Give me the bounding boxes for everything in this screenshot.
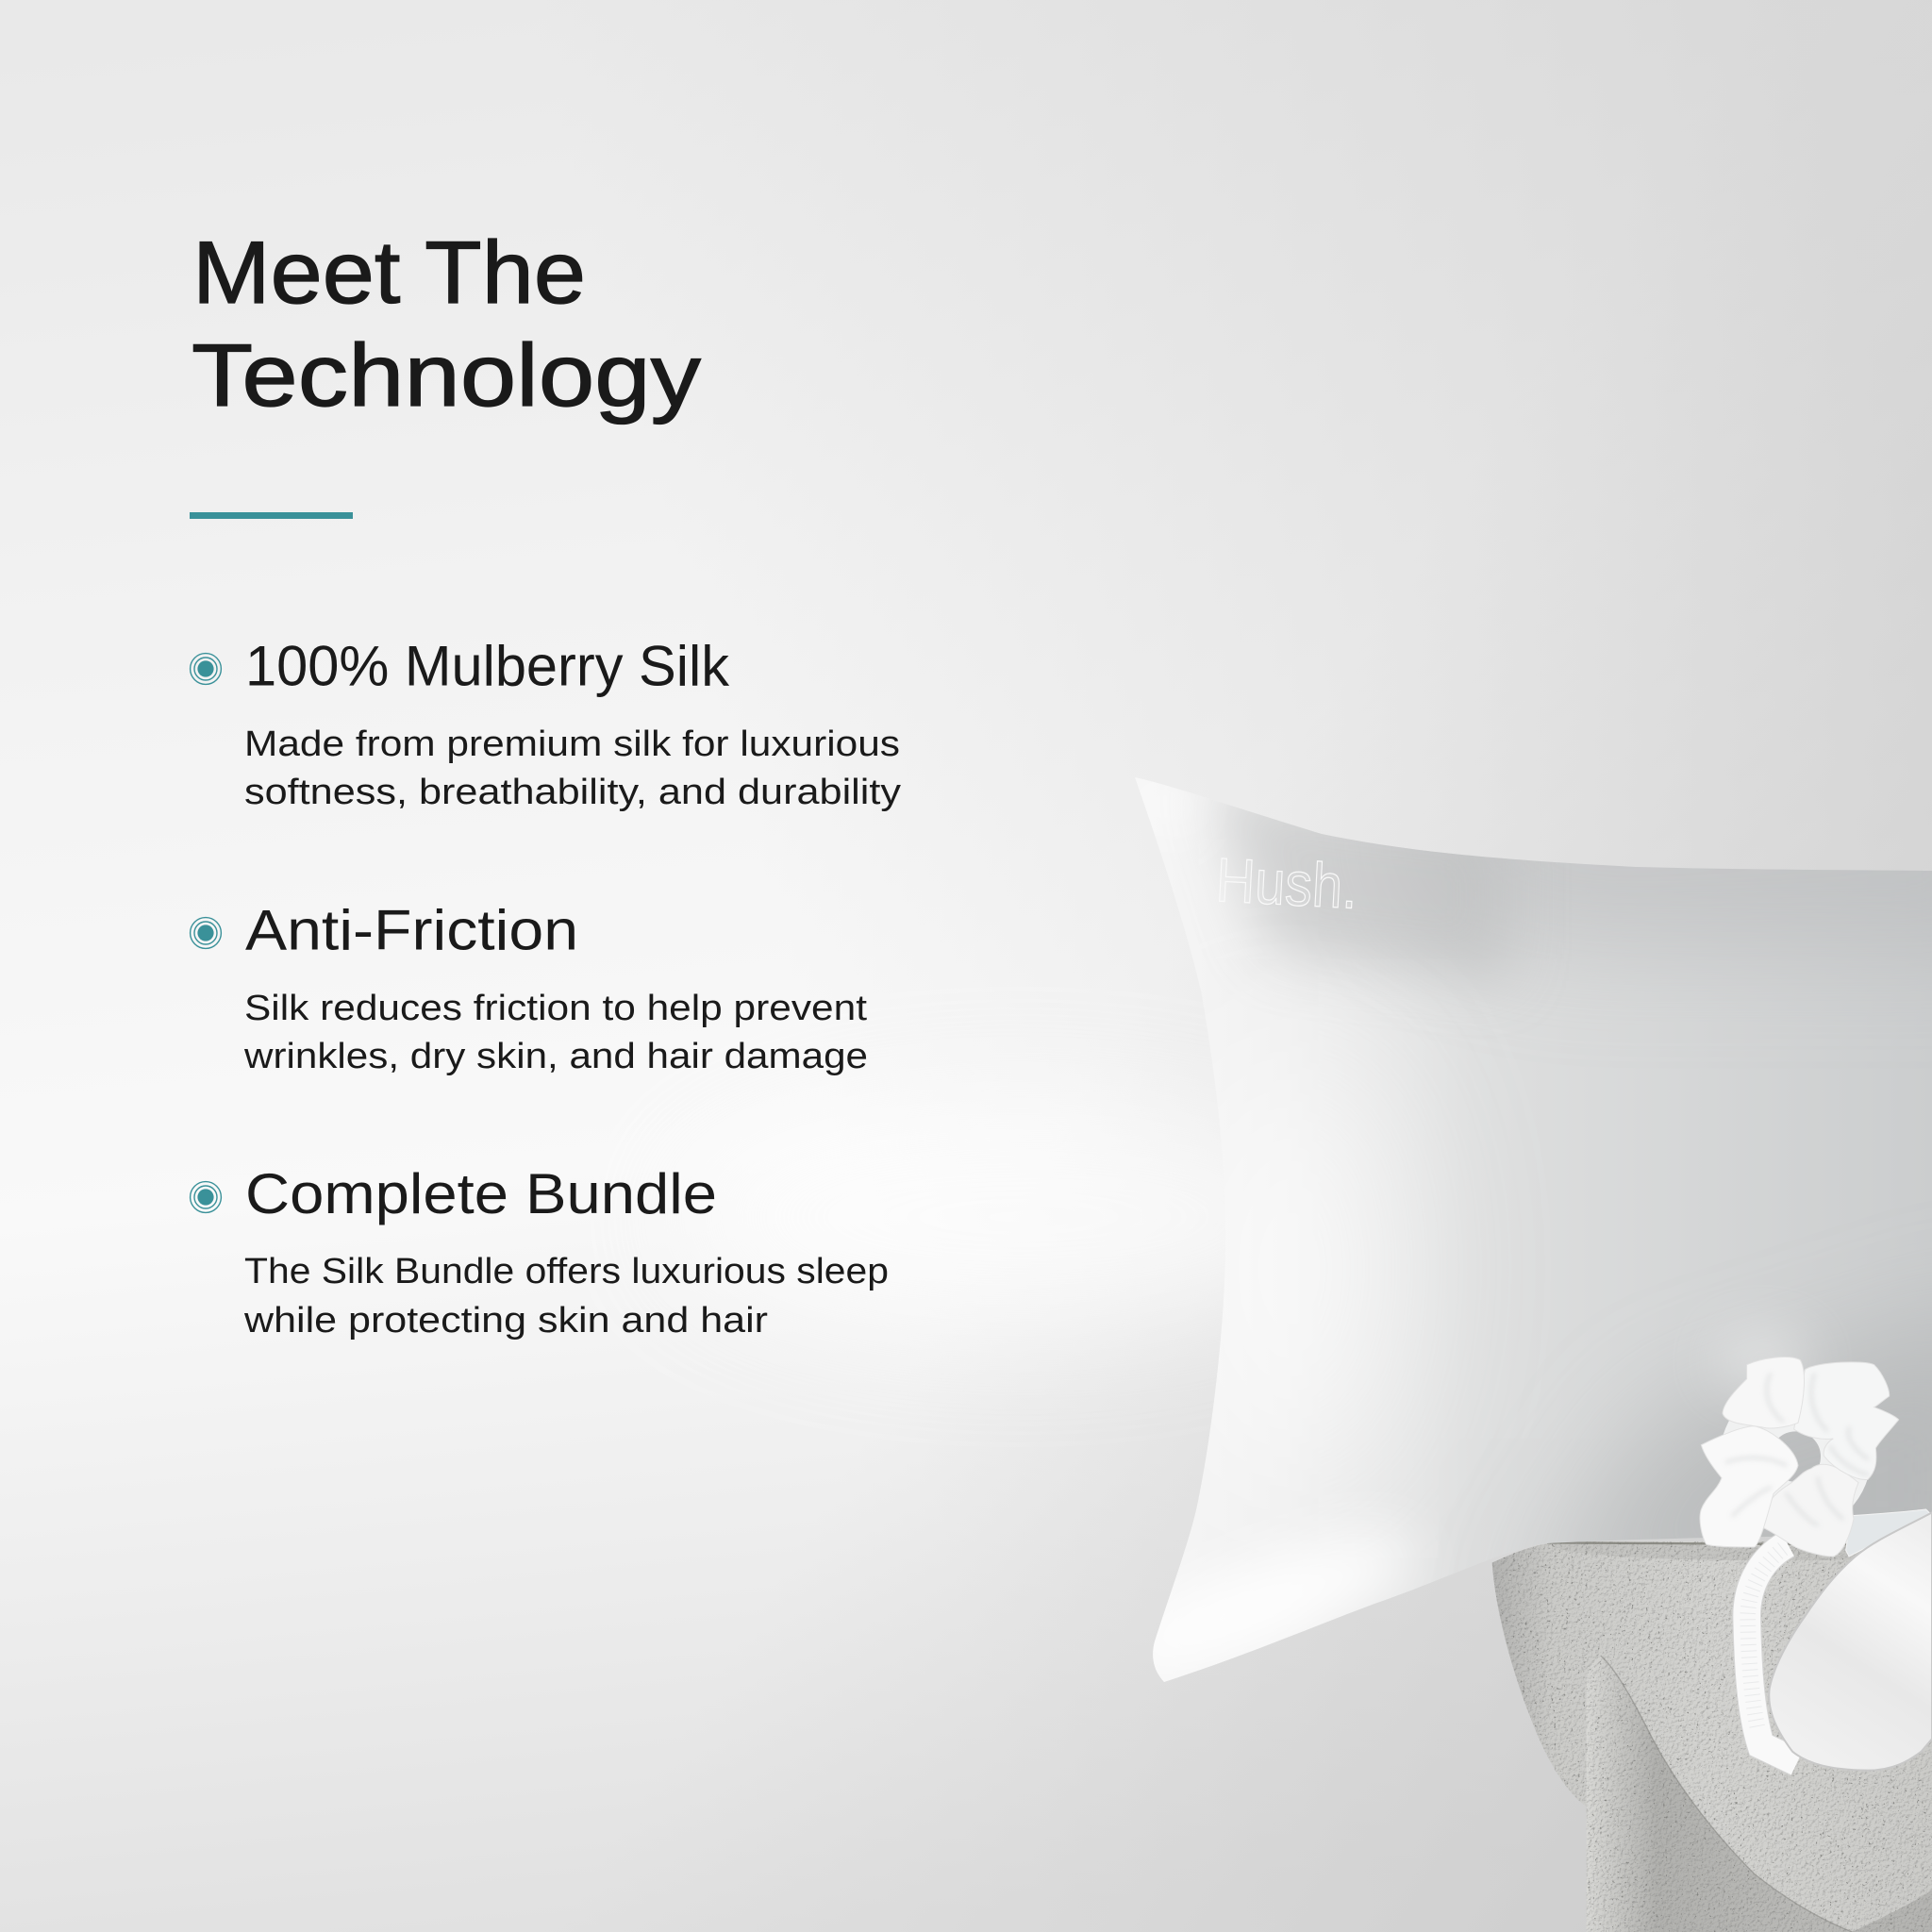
feature: 100% Mulberry Silk: [191, 634, 901, 812]
feature: Complete Bundle: [191, 1162, 889, 1341]
scrunchie: [1700, 1357, 1899, 1557]
feature: Anti-Friction: [191, 898, 868, 1076]
pillow body: [1135, 777, 1932, 1682]
description: [244, 724, 901, 812]
icon: teal target bullet: [191, 654, 221, 684]
lip shadow line: [1547, 1542, 1861, 1544]
strap left: [1747, 1544, 1797, 1762]
heading: Anti-Friction: [245, 898, 578, 962]
description: Silk reduces friction to help prevent: [244, 989, 867, 1028]
concrete pedestal: [1472, 1528, 1932, 1932]
description: wrinkles, dry skin, and hair damage: [243, 1037, 868, 1076]
description: while protecting skin and hair: [243, 1301, 768, 1341]
embroidered logo: Hush.: [1214, 844, 1359, 922]
right column: [1852, 1890, 1932, 1932]
icon: teal target bullet: [191, 918, 221, 948]
title: [192, 223, 701, 425]
heading: Complete Bundle: [245, 1162, 717, 1225]
silk accessories: [1700, 1357, 1932, 1771]
accent divider: [190, 512, 353, 519]
pedestal bowl: [1492, 1541, 1932, 1932]
description: The Silk Bundle offers luxurious sleep: [244, 1252, 889, 1291]
icon: teal target bullet: [191, 1182, 221, 1212]
title: Meet The: [192, 223, 586, 322]
sleep mask: [1769, 1512, 1932, 1771]
description: [243, 989, 868, 1076]
column ridge: [1601, 1656, 1852, 1932]
description: Made from premium silk for luxurious: [244, 724, 900, 764]
strap right: [1846, 1509, 1931, 1557]
pedestal column: [1587, 1656, 1852, 1932]
pillow shading: [1099, 774, 1932, 1698]
silk pillow: [1099, 774, 1932, 1698]
concrete texture: [1472, 1528, 1932, 1932]
bowl top lip: [1547, 1544, 1861, 1560]
description: softness, breathability, and durability: [244, 773, 901, 812]
title: Technology: [192, 325, 701, 425]
heading: 100% Mulberry Silk: [245, 634, 730, 698]
scrunchie folds: [1726, 1374, 1868, 1525]
description: [243, 1252, 889, 1341]
